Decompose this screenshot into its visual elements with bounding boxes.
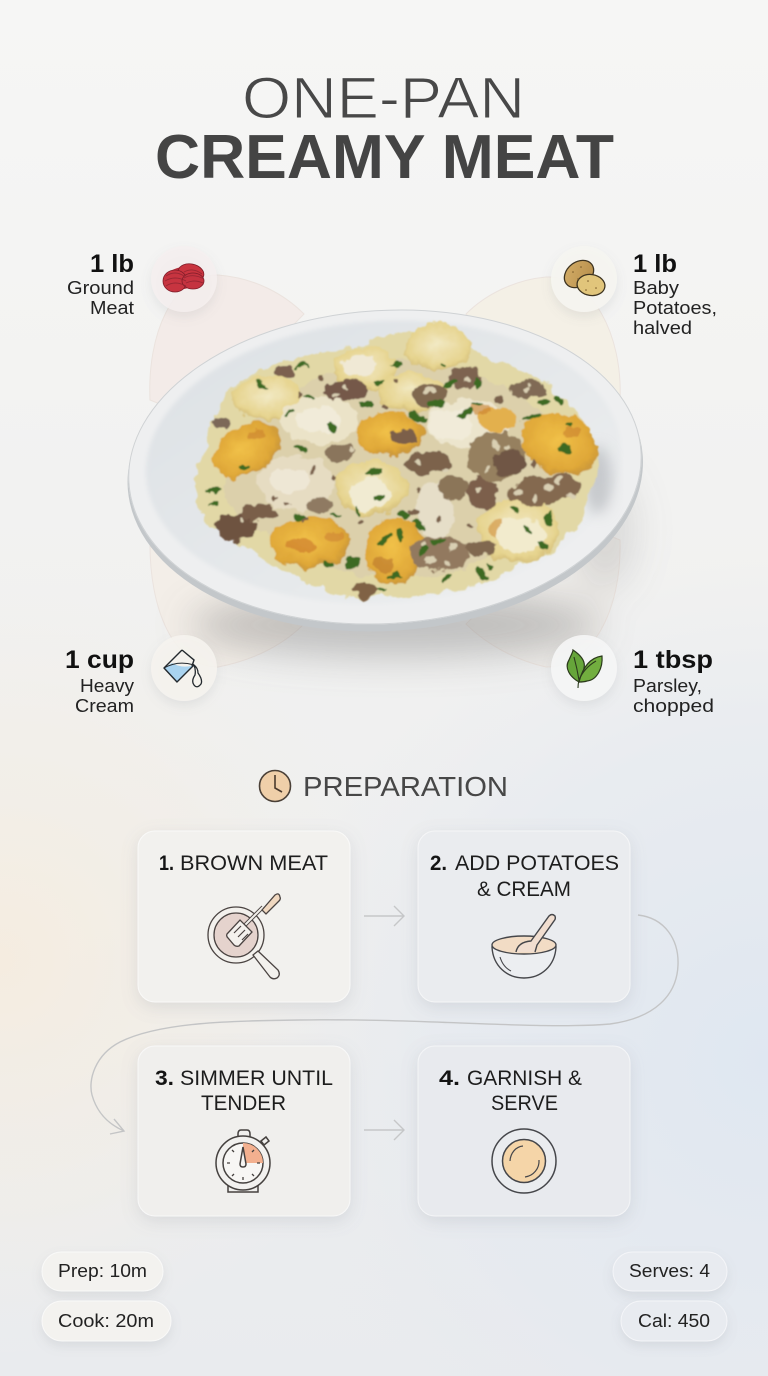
step 4 heading: 4. [439,1067,460,1090]
label: parsley: 1 tbsp [633,646,713,674]
step 3 card [138,1046,350,1216]
stat pill: servings [613,1252,727,1291]
arrow: curved connector from step 2 to step 3 [91,915,678,1134]
label: parsley: chopped [633,696,714,716]
icon: ground meat [151,246,217,312]
cream pools [428,409,472,441]
plate body [118,295,652,646]
ingredient: ground meat [67,246,217,318]
label: baby potatoes: Potatoes, [633,298,717,318]
sauce [194,332,598,598]
step 4 heading: GARNISH & [467,1067,582,1090]
icon: potatoes [551,246,617,312]
label: ground meat: Ground [67,278,134,298]
label: baby potatoes: 1 lb [633,250,677,278]
step 3 heading: SIMMER UNTIL [180,1067,333,1090]
label: baby potatoes: Baby [633,278,679,298]
cream-covered crumbles [240,377,573,568]
title: ONE-PAN [242,66,525,131]
icon: stopwatch [216,1130,270,1192]
label: ground meat: Meat [90,298,134,318]
stat pill: prep time [42,1252,163,1291]
arrow: step 3 to step 4 [364,1120,404,1140]
ingredient: parsley [551,635,714,716]
step 2 heading [430,852,619,901]
step 4 heading [439,1067,582,1115]
step 1 heading: 1. [159,852,174,875]
stat pill: calories: Cal: 450 [638,1311,710,1331]
step 3 heading: 3. [155,1067,174,1090]
stat pill: cook time [42,1301,171,1341]
browned edges [286,538,314,552]
step 2 heading: ADD POTATOES [455,852,619,875]
label: baby potatoes: halved [633,318,692,338]
food [194,324,607,598]
stat pill: prep time: Prep: 10m [58,1261,147,1281]
title [155,66,614,192]
label: ground meat: 1 lb [90,250,134,278]
ingredient: baby potatoes [551,246,717,338]
icon: serving plate [492,1129,556,1193]
label: baby potatoes [633,250,717,338]
label: heavy cream: Cream [75,696,134,716]
potatoes [404,324,472,370]
decorative petals behind plate [150,275,620,667]
step 2 heading: & CREAM [477,878,571,901]
parsley [204,362,575,594]
step 1 card [138,831,350,1002]
icon: bowl with spoon [492,914,556,978]
step 4 card [418,1046,630,1216]
plate shadow [190,470,635,657]
label: heavy cream: 1 cup [65,646,134,674]
step 2 heading: 2. [430,852,447,875]
stat pill: servings: Serves: 4 [629,1261,710,1281]
ingredient: heavy cream [65,635,217,716]
step 3 heading: TENDER [201,1092,286,1115]
ground meat [215,513,257,541]
label: parsley: Parsley, [633,676,702,696]
stat pill: calories [621,1301,727,1341]
title: CREAMY MEAT [155,123,614,192]
label: parsley [633,646,714,716]
step 1 heading: BROWN MEAT [180,852,328,875]
stat pill: cook time: Cook: 20m [58,1311,154,1331]
label: heavy cream [65,646,134,716]
label: heavy cream: Heavy [80,676,134,696]
icon: clock [260,770,290,802]
arrow: step 1 to step 2 [364,906,404,926]
step 4 heading: SERVE [491,1092,558,1115]
food shadow [584,446,612,514]
preparation heading: PREPARATION [303,771,508,802]
icon: pouring cream [151,635,217,701]
step 3 heading [155,1067,333,1115]
icon: frying pan with spatula [208,894,280,979]
step 2 card [418,831,630,1002]
label: ground meat [67,250,134,318]
plate of creamy meat and potatoes [118,295,652,657]
icon: parsley leaves [551,635,617,701]
